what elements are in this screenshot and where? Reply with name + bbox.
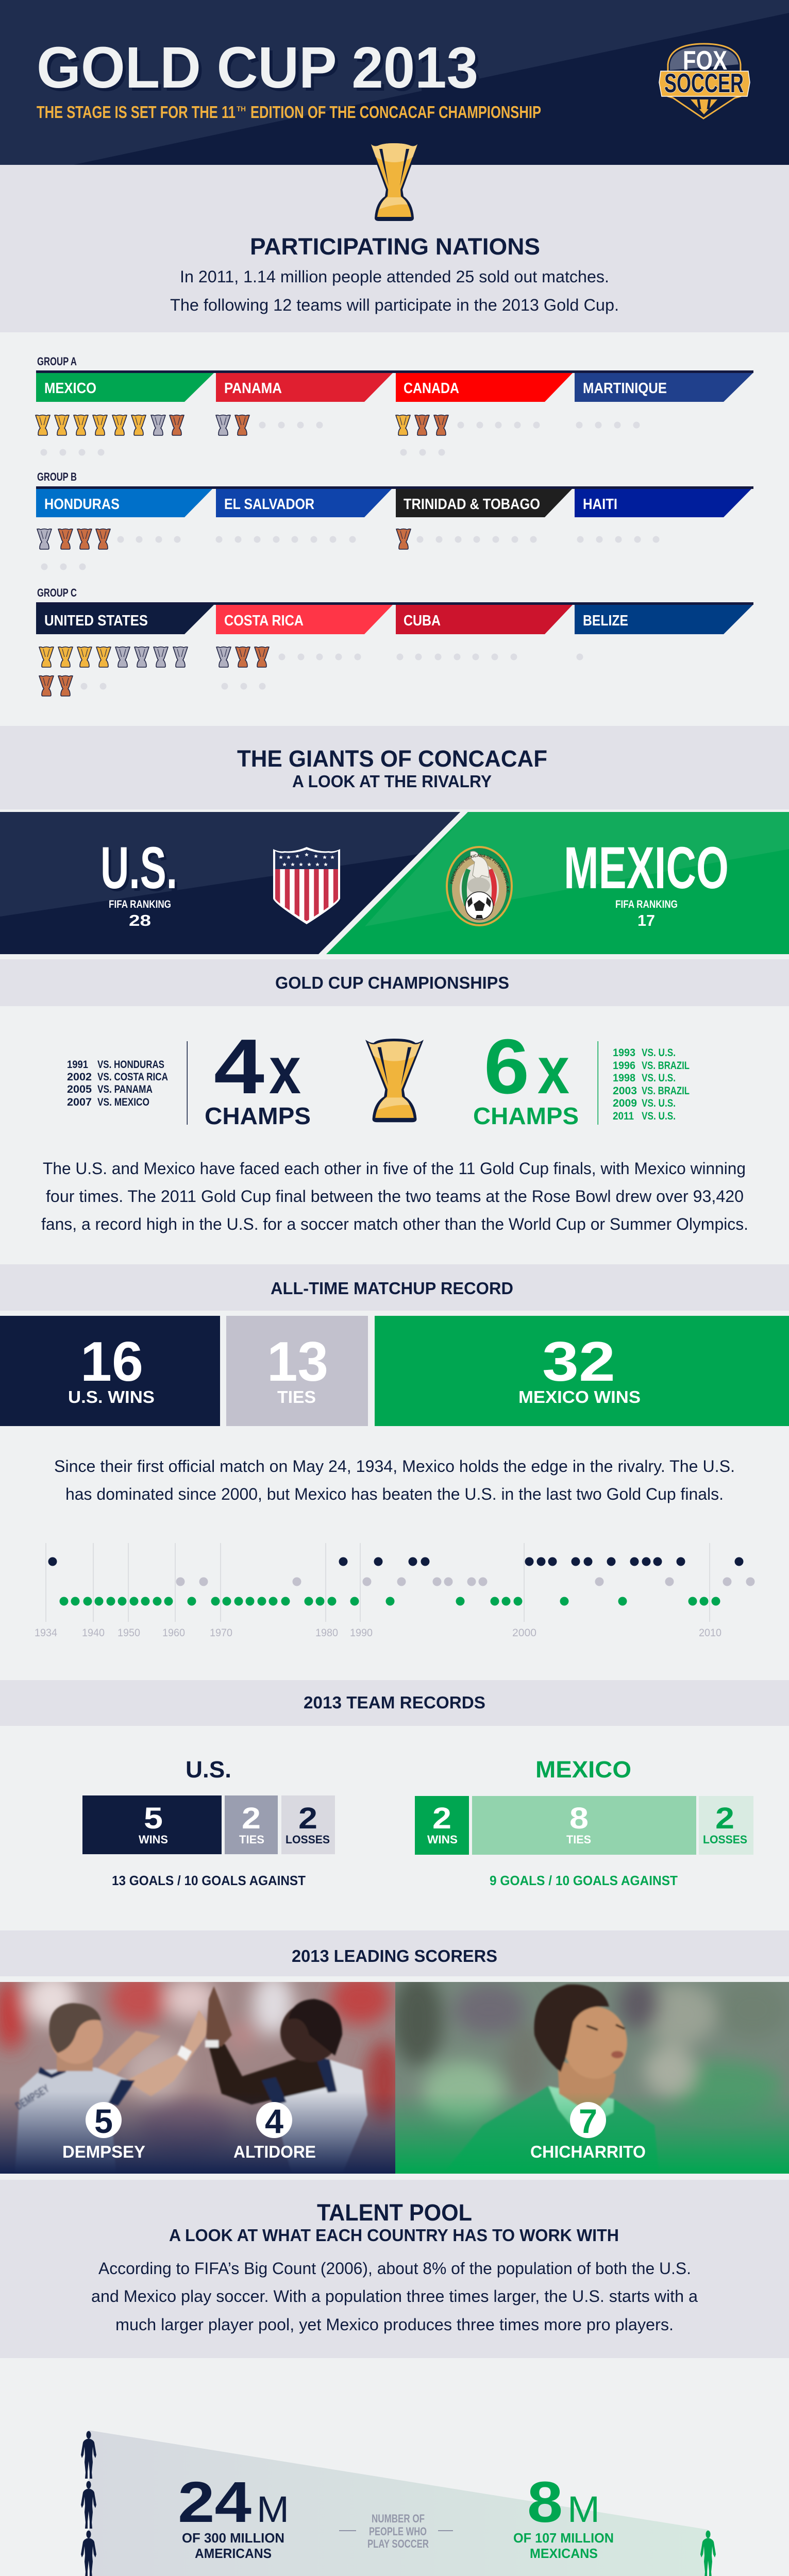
intro text [170, 267, 619, 314]
subtitle [37, 103, 541, 122]
panel: ties [226, 1316, 368, 1426]
panel: U.S. 2013 record: LOSSES [286, 1833, 330, 1846]
U.S. name and ranking: FIFA RANKING [109, 899, 171, 910]
panel: group B: HONDURAS [44, 496, 120, 513]
badge: Altidore goals [256, 2102, 292, 2140]
panel: U.S. 2013 record: WINS [139, 1833, 168, 1846]
intro text: In 2011, 1.14 million people attended 25 sold out matches. [180, 267, 609, 286]
Mexico title list: 1998 [613, 1072, 635, 1084]
stat: 24M: AMERICANS [195, 2546, 272, 2561]
icons: U.S. people [81, 2431, 96, 2576]
chart: people who play soccer wedge [81, 2430, 716, 2576]
panel: group B: GROUP B [37, 470, 77, 483]
player: Altidore [205, 1986, 367, 2174]
year axis labels: 1980 [315, 1627, 338, 1639]
heading band: gold cup championships [0, 959, 789, 1006]
heading band: 2013 leading scorers [0, 1930, 789, 1976]
panel: U.S. 2013 record: 13 GOALS / 10 GOALS AGAINST [112, 1873, 306, 1888]
year axis labels: 1990 [350, 1627, 373, 1639]
stat label: number of people: PEOPLE WHO [369, 2525, 427, 2538]
panel: Mexico 2013 record: 2 [715, 1802, 734, 1835]
subtitle: EDITION OF THE CONCACAF CHAMPIONSHIP [250, 103, 541, 122]
panel: giants of CONCACAF heading: THE GIANTS OF CONCACAF [237, 745, 547, 772]
heading: PARTICIPATING NATIONS [250, 233, 540, 260]
badge: Dempsey goals [86, 2102, 122, 2140]
stat: 24M: M [257, 2489, 289, 2530]
trophies: group A [36, 415, 640, 455]
logo: Fox Soccer shield: SOCCER [664, 69, 744, 98]
icon: Mexico crest [445, 842, 512, 925]
U.S. title list: 2005 [67, 1083, 92, 1095]
text block: rivalry paragraph: Since their first official match on May 24, 1934, Mexico holds the edge in the rivalry. The U.S. [54, 1457, 735, 1476]
panel: group A: CANADA [404, 380, 459, 397]
subtitle: THE STAGE IS SET FOR THE 11 [37, 103, 236, 122]
year axis labels: 2000 [512, 1627, 536, 1639]
icon: gold cup trophy [368, 141, 420, 221]
panel: group A: GROUP A [37, 355, 77, 368]
year axis labels: 1934 [35, 1627, 57, 1639]
badge: Dempsey goals: 5 [94, 2102, 113, 2140]
icon: U.S. shield [273, 847, 340, 926]
trophies: group C [39, 647, 583, 696]
panel: U.S. 2013 record: 5 [144, 1802, 163, 1835]
Mexico 6x champs: 6 [484, 1023, 529, 1110]
Mexico 6x champs: x [538, 1032, 569, 1108]
chart: match timeline [35, 1543, 754, 1639]
heading band: gold cup championships: GOLD CUP CHAMPIONSHIPS [275, 973, 509, 992]
U.S. name and ranking: 28 [129, 911, 151, 929]
heading band: all-time matchup record [0, 1264, 789, 1311]
Mexico name and ranking [564, 835, 729, 929]
U.S. title list: 2002 [67, 1071, 92, 1083]
year axis labels: 1940 [82, 1627, 105, 1639]
panel: rivalry banner [0, 812, 789, 954]
panel: U.S. 2013 record: U.S. [186, 1756, 231, 1783]
panel: talent pool intro: and Mexico play soccer. With a population three times larger, the U.S. starts with a [91, 2287, 698, 2306]
year axis labels: 2010 [699, 1627, 721, 1639]
panel: group B: EL SALVADOR [224, 496, 314, 513]
panel: ties: TIES [277, 1387, 316, 1406]
label: Chicharrito: CHICHARRITO [530, 2142, 646, 2161]
badge: Altidore goals: 4 [265, 2102, 283, 2140]
U.S. 4x champs [205, 1023, 311, 1129]
panel: U.S. wins [0, 1316, 220, 1426]
text block: finals paragraph: four times. The 2011 Gold Cup final between the two teams at the Rose Bowl drew over 93,420 [46, 1187, 744, 1206]
panel: Mexico wins [375, 1316, 789, 1426]
icon: Mexico person [700, 2531, 716, 2576]
Mexico title list: VS. U.S. [642, 1072, 676, 1084]
stat: 8M: M [567, 2489, 600, 2530]
panel: talent pool intro: A LOOK AT WHAT EACH COUNTRY HAS TO WORK WITH [169, 2226, 619, 2245]
panel: group A [36, 355, 753, 455]
year axis labels [35, 1627, 721, 1639]
panel: Mexico 2013 record: 2 [432, 1802, 451, 1835]
panel: talent pool intro: TALENT POOL [317, 2199, 472, 2226]
U.S. 4x champs: x [269, 1032, 301, 1108]
U.S. win dots [48, 1557, 743, 1566]
panel: group B: HAITI [583, 496, 617, 513]
panel: Mexico 2013 record: TIES [566, 1833, 591, 1846]
text block: finals paragraph: The U.S. and Mexico have faced each other in five of the 11 Gold Cup finals, with Mexico winning [43, 1159, 746, 1178]
year axis labels: 1960 [162, 1627, 185, 1639]
panel: participating nations intro [0, 165, 789, 332]
Mexico title list: VS. U.S. [642, 1047, 676, 1059]
stat: 24M [178, 2470, 289, 2561]
Mexico title list: VS. BRAZIL [642, 1085, 690, 1097]
stat label: number of people [339, 2512, 453, 2550]
label: Altidore: ALTIDORE [233, 2142, 316, 2161]
U.S. title list: 2007 [67, 1096, 92, 1108]
Mexico title list: VS. BRAZIL [642, 1060, 690, 1072]
U.S. title list: 1991 [67, 1059, 88, 1071]
logo: Fox Soccer shield: FOX [683, 46, 727, 76]
logo: Fox Soccer shield [659, 44, 750, 118]
panel: giants of CONCACAF heading: A LOOK AT THE RIVALRY [292, 772, 492, 791]
text block: rivalry paragraph [54, 1457, 735, 1503]
Mexico title list: 1993 [613, 1047, 635, 1059]
heading band: 2013 team records [0, 1680, 789, 1726]
panel: group C [36, 586, 753, 696]
Mexico title list: VS. U.S. [642, 1110, 676, 1122]
Mexico title list: 2003 [613, 1085, 637, 1097]
panel: Mexico 2013 record: WINS [427, 1833, 458, 1846]
panel: Mexico 2013 record [415, 1756, 753, 1888]
Mexico title list [613, 1047, 690, 1122]
panel: Mexico 2013 record: MEXICO [535, 1756, 631, 1783]
stat: 24M: OF 300 MILLION [182, 2530, 284, 2546]
Mexico 6x champs [473, 1023, 579, 1129]
panel: Mexico 2013 record: 9 GOALS / 10 GOALS AGAINST [490, 1873, 678, 1888]
Mexico title list: 2009 [613, 1097, 637, 1109]
label: Dempsey: DEMPSEY [62, 2142, 145, 2161]
panel: header [0, 0, 789, 165]
panel: group C: UNITED STATES [44, 613, 148, 629]
panel: U.S. 2013 record: 2 [242, 1802, 261, 1835]
text block: finals paragraph [41, 1159, 748, 1233]
panel: Mexico scorer photo [392, 1973, 789, 2174]
panel: championships comparison [67, 1023, 690, 1129]
stat: 8M: MEXICANS [530, 2546, 598, 2561]
U.S. 4x champs: CHAMPS [205, 1103, 311, 1129]
panel: group A: PANAMA [224, 380, 282, 397]
panel: U.S. 2013 record: TIES [239, 1833, 264, 1846]
badge: Chicharrito goals: 7 [579, 2102, 597, 2140]
panel: group B [36, 470, 753, 570]
panel: ties: 13 [267, 1330, 328, 1393]
year axis labels: 1950 [117, 1627, 140, 1639]
U.S. title list: VS. HONDURAS [97, 1059, 164, 1071]
heading band: all-time matchup record: ALL-TIME MATCHUP RECORD [271, 1279, 513, 1298]
U.S. name and ranking: U.S. [100, 835, 177, 901]
text block: finals paragraph: fans, a record high in the U.S. for a soccer match other than the World Cup or Summer Olympics. [41, 1215, 748, 1233]
U.S. 4x champs: 4 [214, 1023, 264, 1110]
U.S. title list: VS. PANAMA [97, 1083, 153, 1095]
panel: U.S. scorers photo [0, 1973, 402, 2174]
panel: group C: CUBA [404, 613, 441, 629]
panel: Mexico 2013 record: LOSSES [703, 1833, 747, 1846]
stat: 8M: 8 [527, 2470, 563, 2534]
panel: talent pool intro: According to FIFA’s Big Count (2006), about 8% of the population of both the U.S. [98, 2259, 691, 2278]
trophies: group B [37, 529, 660, 570]
panel: giants of CONCACAF heading [0, 726, 789, 809]
stat: 8M [513, 2470, 614, 2561]
panel: Mexico wins: 32 [542, 1330, 615, 1393]
panel: U.S. 2013 record [82, 1756, 335, 1888]
panel: Mexico wins: MEXICO WINS [518, 1387, 641, 1406]
U.S. name and ranking [100, 835, 177, 929]
U.S. title list: VS. MEXICO [97, 1096, 149, 1108]
stat label: number of people: PLAY SOCCER [367, 2537, 429, 2550]
badge: Chicharrito goals [570, 2102, 606, 2140]
tie dots [176, 1578, 754, 1586]
heading band: 2013 team records: 2013 TEAM RECORDS [304, 1693, 485, 1712]
Mexico name and ranking: FIFA RANKING [615, 899, 678, 910]
intro text: The following 12 teams will participate in the 2013 Gold Cup. [170, 296, 619, 314]
text block: rivalry paragraph: has dominated since 2000, but Mexico has beaten the U.S. in the last two Gold Cup finals. [65, 1485, 724, 1503]
panel: group C: BELIZE [583, 613, 628, 629]
panel: Mexico 2013 record: 8 [569, 1802, 589, 1835]
stat: 24M: 24 [178, 2470, 251, 2534]
panel: group A: MEXICO [44, 380, 96, 397]
Mexico title list: VS. U.S. [642, 1097, 676, 1109]
player: Dempsey [13, 2003, 211, 2174]
panel: U.S. wins: U.S. WINS [68, 1387, 155, 1406]
Mexico win dots [60, 1597, 720, 1605]
U.S. title list [67, 1059, 168, 1108]
panel: U.S. 2013 record: 2 [298, 1802, 317, 1835]
panel: group C: COSTA RICA [224, 613, 304, 629]
heading band: 2013 leading scorers: 2013 LEADING SCORERS [292, 1946, 497, 1965]
panel: talent pool intro: much larger player pool, yet Mexico produces three times more pro players. [115, 2315, 674, 2334]
stat label: number of people: NUMBER OF [372, 2512, 425, 2525]
title: GOLD CUP 2013 [37, 35, 478, 100]
panel: U.S. wins: 16 [80, 1330, 143, 1393]
Mexico title list: 2011 [613, 1110, 634, 1122]
panel: group B: TRINIDAD & TOBAGO [404, 496, 540, 513]
subtitle: TH [237, 105, 246, 113]
stat: 8M: OF 107 MILLION [513, 2530, 614, 2546]
icon: gold cup trophy [365, 1039, 424, 1122]
year axis labels: 1970 [210, 1627, 232, 1639]
Mexico 6x champs: CHAMPS [473, 1103, 579, 1129]
Mexico title list: 1996 [613, 1060, 635, 1072]
U.S. title list: VS. COSTA RICA [97, 1071, 168, 1083]
panel: group C: GROUP C [37, 586, 77, 599]
player: Dempsey: DEMPSEY [13, 2082, 52, 2112]
panel: talent pool intro [0, 2180, 789, 2358]
panel: group A: MARTINIQUE [583, 380, 667, 397]
player: Chicharrito [443, 1985, 659, 2174]
Mexico name and ranking: 17 [637, 911, 655, 929]
